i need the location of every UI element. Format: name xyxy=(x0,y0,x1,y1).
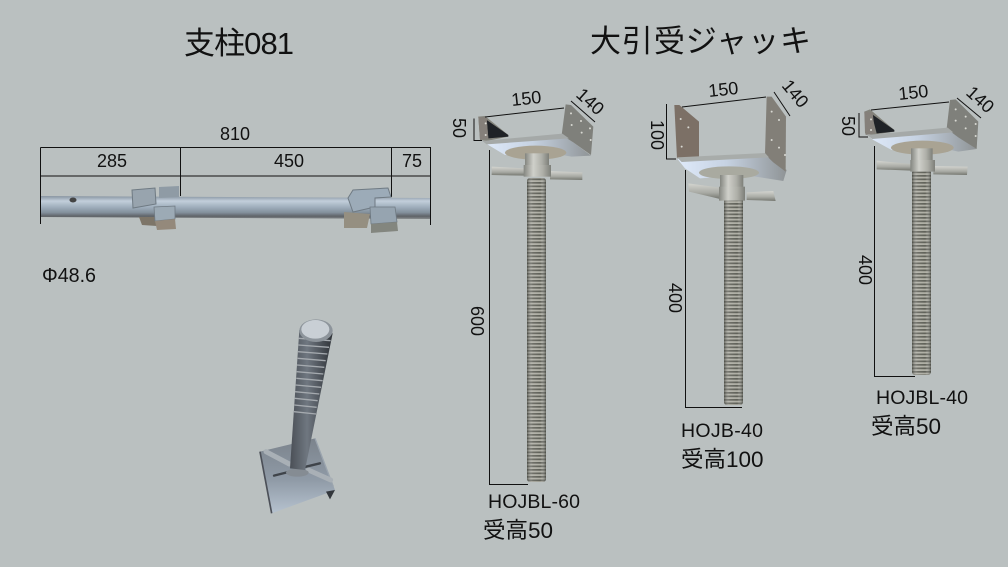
threaded rod xyxy=(527,178,546,482)
labels xyxy=(838,81,998,285)
labels: 150 xyxy=(510,87,542,110)
labels: 600 xyxy=(467,306,487,336)
labels: 150 xyxy=(707,78,739,101)
U head xyxy=(674,97,787,201)
labels: 400 xyxy=(665,283,685,313)
threaded rod xyxy=(912,170,931,375)
labels: 150 xyxy=(897,81,929,104)
dimension labels: post: 450 xyxy=(274,151,304,171)
title: beam support jack: 大引受ジャッキ xyxy=(590,24,811,59)
model label: HOJB-40 xyxy=(681,420,763,442)
U head xyxy=(478,104,593,180)
dimension labels: post: 285 xyxy=(97,151,127,171)
labels: 100 xyxy=(647,120,667,150)
model label: HOJBL-40 xyxy=(876,387,968,409)
dimension lines xyxy=(859,98,981,376)
labels xyxy=(647,76,813,313)
dimension labels: post: 810 xyxy=(220,124,250,144)
jack HOJBL-40 xyxy=(838,81,998,439)
dimension lines xyxy=(666,92,790,408)
height label: 受高50 xyxy=(483,518,553,543)
title: post 081: 支柱081 xyxy=(184,26,294,61)
labels: 140 xyxy=(962,82,998,117)
dimension lines xyxy=(474,101,595,484)
labels: 140 xyxy=(778,76,813,112)
labels xyxy=(449,84,608,336)
right brackets xyxy=(344,188,398,233)
jack HOJB-40 xyxy=(647,76,813,472)
dimension lines: post xyxy=(40,148,431,225)
labels: 400 xyxy=(855,255,875,285)
labels: 140 xyxy=(572,84,608,119)
jack HOJBL-60 xyxy=(449,84,608,543)
dimension labels: post xyxy=(97,124,422,171)
labels: 50 xyxy=(449,118,469,138)
phi label: Φ48.6 xyxy=(42,265,96,287)
U head xyxy=(864,99,978,175)
jack photo: base plate jack xyxy=(260,319,335,513)
left brackets xyxy=(132,186,179,230)
height label: 受高50 xyxy=(871,414,941,439)
threaded rod xyxy=(724,190,743,405)
labels: 50 xyxy=(838,116,858,136)
post 081 pipe with brackets xyxy=(41,186,430,233)
dimension labels: post: 75 xyxy=(402,151,422,171)
model label: HOJBL-60 xyxy=(488,491,580,513)
height label: 受高100 xyxy=(681,447,764,472)
